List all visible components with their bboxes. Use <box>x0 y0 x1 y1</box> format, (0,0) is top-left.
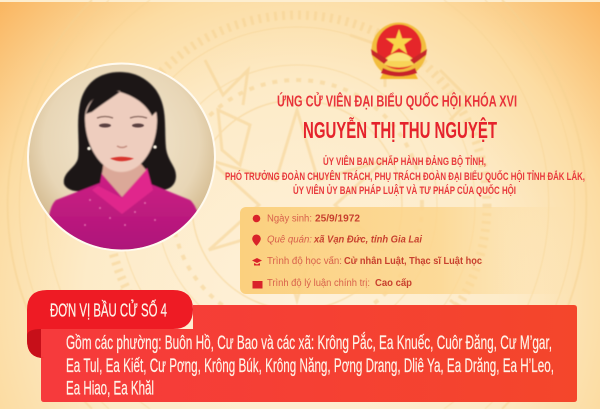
portrait photo <box>27 62 216 262</box>
icon: video badge <box>252 281 262 288</box>
icon: graduation cap <box>252 258 262 266</box>
detail: birth date: Ngày sinh: <box>267 214 312 224</box>
detail: political theory: Cao cấp <box>375 277 412 289</box>
text block: positions held: ỦY VIÊN ỦY BAN PHÁP LUẬT VÀ TƯ PHÁP CỦA QUỐC HỘI <box>293 183 516 197</box>
detail: education: Trình độ học vấn: <box>267 255 342 267</box>
unit description: Ea Hiao, Ea Khăl <box>66 378 154 400</box>
icon: location pin <box>252 234 261 246</box>
face <box>85 91 157 172</box>
detail: education: Cử nhân Luật, Thạc sĩ Luật học <box>344 256 482 267</box>
icon: birth date <box>253 215 260 222</box>
panel: electoral unit <box>27 290 577 402</box>
unit header tab <box>27 290 193 358</box>
face details <box>84 116 157 226</box>
detail: hometown: xã Vạn Đức, tỉnh Gia Lai <box>313 234 422 246</box>
detail: birth date: 25/9/1972 <box>315 214 360 224</box>
detail: hometown: Quê quán: <box>267 234 312 246</box>
panel: personal details <box>240 207 570 294</box>
text block: positions held: ỦY VIÊN BAN CHẤP HÀNH ĐẢNG BỘ TỈNH, <box>323 155 486 168</box>
content panel <box>41 305 577 402</box>
unit heading: ĐƠN VỊ BẦU CỬ SỐ 4 <box>50 300 167 320</box>
detail: political theory: Trình độ lý luận chính trị: <box>267 278 370 289</box>
unit description <box>66 332 554 400</box>
hair <box>64 72 176 192</box>
national emblem <box>371 22 427 79</box>
ao dai <box>48 172 198 250</box>
neck <box>102 160 146 197</box>
heading: candidate name: NGUYỄN THỊ THU NGUYỆT <box>303 115 497 143</box>
text block: positions held <box>225 155 585 197</box>
